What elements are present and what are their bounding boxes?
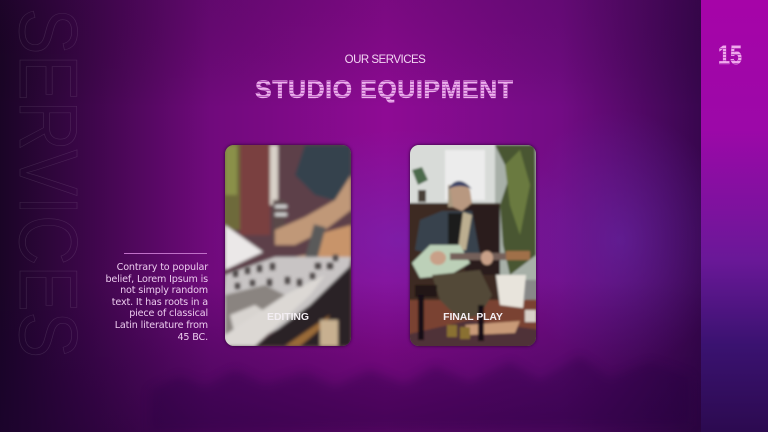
page number: 15 [718,40,742,70]
card: editing [225,145,351,346]
body text: belief, Lorem Ipsum is [105,274,208,285]
body text: piece of classical [129,308,208,319]
body text: not simply random [120,285,208,296]
body text: Contrary to popular [117,262,208,273]
label: FINAL PLAY [443,311,503,323]
card: final play [410,145,536,346]
subtitle: OUR SERVICES [345,54,425,66]
body text: Latin literature from [115,320,208,331]
side panel [701,0,768,432]
crowd silhouette [150,356,691,432]
title: STUDIO EQUIPMENT [255,76,513,104]
label: EDITING [267,311,309,323]
body text [105,262,208,343]
divider rule [124,253,207,254]
body text: 45 BC. [177,332,208,343]
body text: text. It has roots in a [112,297,208,308]
